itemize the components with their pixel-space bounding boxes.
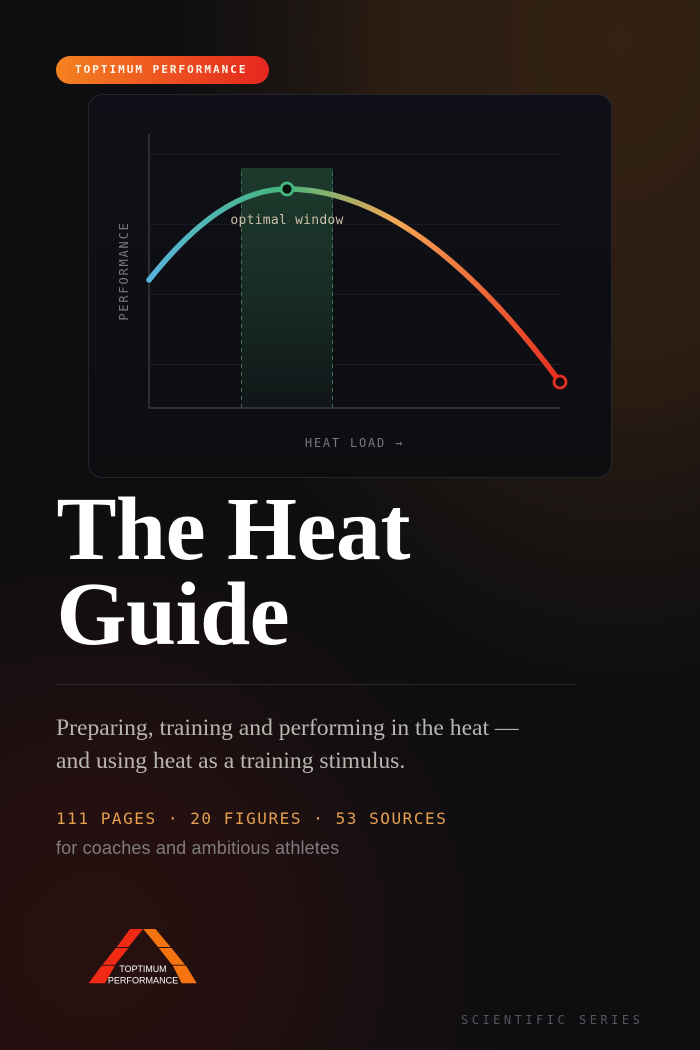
performance curve — [149, 189, 560, 382]
optimal window band — [241, 168, 333, 408]
series label: SCIENTIFIC SERIES — [461, 1013, 643, 1027]
divider — [56, 684, 576, 685]
subtitle: Preparing, training and performing in the heat — — [56, 715, 519, 741]
badge: Toptimum Performance — [56, 56, 269, 84]
audience line: for coaches and ambitious athletes — [56, 838, 339, 858]
title: Guide — [56, 565, 289, 664]
stats line: 111 PAGES · 20 FIGURES · 53 SOURCES — [56, 809, 447, 828]
badge: Toptimum Performance: TOPTIMUM PERFORMANCE — [75, 63, 247, 76]
logo: orange leg — [143, 929, 197, 983]
label: optimal window: optimal window — [230, 213, 344, 228]
peak marker — [281, 183, 293, 195]
x axis label: HEAT LOAD → — [305, 436, 404, 450]
logo text: TOPTIMUM — [119, 964, 167, 974]
title — [56, 480, 410, 664]
logo: red leg — [88, 929, 143, 983]
title: The Heat — [56, 480, 410, 578]
end marker — [554, 376, 566, 388]
logo — [88, 929, 197, 985]
panel: performance curve chart — [88, 94, 612, 478]
logo: PERFORMANCE — [108, 975, 178, 985]
chart card — [88, 94, 612, 478]
subtitle — [56, 715, 519, 774]
y axis label: PERFORMANCE — [117, 221, 131, 321]
subtitle: and using heat as a training stimulus. — [56, 748, 405, 774]
grid lines — [149, 154, 560, 364]
axes — [149, 134, 560, 408]
